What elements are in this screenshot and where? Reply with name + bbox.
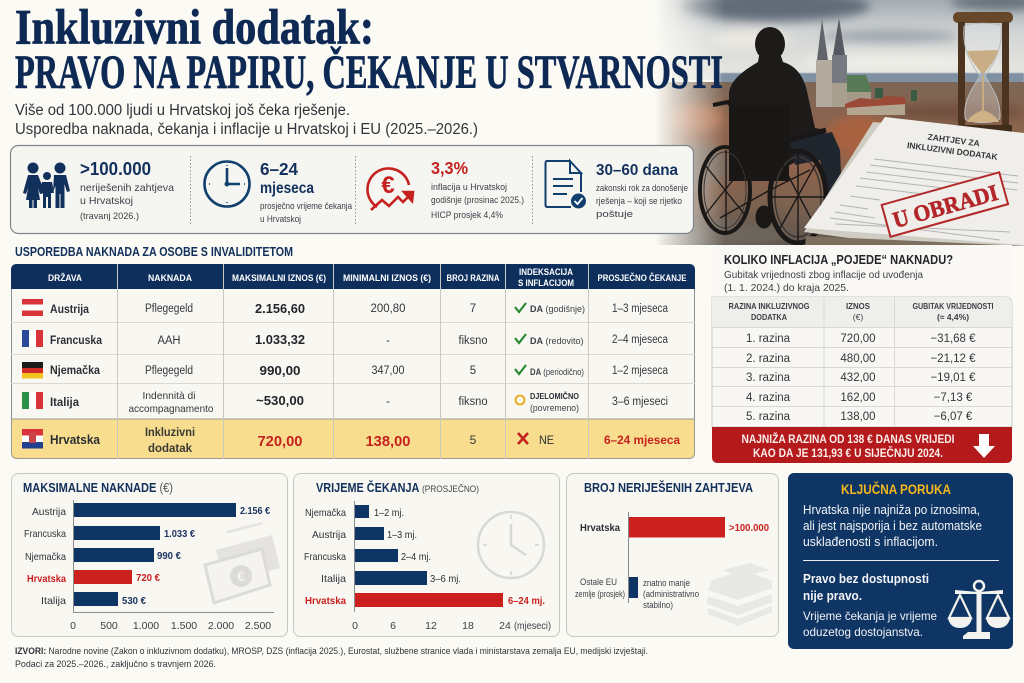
stat: pending requests	[80, 159, 174, 222]
heading: pending requests: BROJ NERIJEŠENIH ZAHTJEVA	[584, 480, 753, 495]
hourglass	[953, 12, 1013, 133]
inflation table: 5. razina	[746, 411, 791, 423]
bars: pending requests: Ostale EU	[580, 577, 617, 588]
subtitle: Više od 100.000 ljudi u Hrvatskoj još čeka rješenje.	[15, 102, 350, 119]
inflation table: −6,07 €	[934, 411, 973, 423]
bars: waiting time: 1–3 mj.	[387, 529, 417, 541]
document pile with stamp: ZAHTJEV ZA	[927, 132, 980, 148]
row: Hrvatska highlighted: 5	[470, 433, 477, 447]
inflation table: (≈ 4,4%)	[937, 312, 969, 322]
row: Njemačka	[22, 362, 669, 378]
panel: maximum benefits chart	[12, 474, 288, 636]
panel: waiting time chart	[294, 474, 560, 636]
key message text: Hrvatska nije najniža po iznosima,	[803, 503, 980, 517]
row: Njemačka: DA (periodično)	[530, 367, 584, 377]
row: Hrvatska highlighted: NE	[539, 433, 554, 447]
bars: maximum benefits: Njemačka	[25, 551, 66, 563]
stat: legal deadline	[596, 162, 688, 220]
cathedral	[816, 18, 917, 115]
icon: family	[23, 162, 70, 208]
bars: waiting time: 1–2 mj.	[374, 507, 404, 519]
icon: euro with rising arrow: €	[381, 172, 395, 199]
row: Italija: (povremeno)	[530, 403, 579, 413]
callout: lowest level: KAO DA JE 131,93 € U SIJEČNJU 2024.	[753, 447, 943, 460]
key message text: usklađenosti s inflacijom.	[803, 535, 938, 549]
row: Italija: ~530,00	[256, 393, 304, 408]
stat: pending requests: u Hrvatskoj	[80, 195, 133, 207]
row: Austrija: Pflegegeld	[145, 303, 193, 315]
bars: pending requests: (administrativno	[643, 589, 699, 599]
row: Francuska: fiksno	[458, 335, 488, 347]
row: Njemačka: Pflegegeld	[145, 365, 193, 377]
bars: waiting time: 18	[462, 620, 474, 632]
key message conclusion: oduzetog dostojanstva.	[803, 625, 923, 639]
stat: waiting time: 6–24	[260, 159, 298, 179]
bars: waiting time: 6–24 mj.	[508, 595, 545, 607]
stat: inflation: inflacija u Hrvatskoj	[431, 182, 507, 193]
stat: pending requests: (travanj 2026.)	[80, 211, 139, 222]
bars: maximum benefits: 2.000	[208, 620, 234, 632]
stat: inflation: 3,3%	[431, 158, 468, 178]
bars: maximum benefits: 990 €	[157, 550, 181, 562]
bars: pending requests: zemlje (prosjek)	[575, 589, 625, 600]
stat: legal deadline: 30–60 dana	[596, 162, 678, 179]
inflation table: DODATKA	[751, 312, 787, 322]
title: PRAVO NA PAPIRU, ČEKANJE U STVARNOSTI	[15, 45, 723, 99]
bars: maximum benefits: 2.500	[245, 620, 271, 632]
row: Hrvatska highlighted: 720,00	[258, 433, 302, 450]
row: Hrvatska highlighted: 6–24 mjeseca	[604, 433, 680, 447]
row: Austrija: Austrija	[50, 304, 90, 316]
row: Italija: Italija	[50, 397, 80, 409]
subtitle: Usporedba naknada, čekanja i inflacije u Hrvatskoj i EU (2025.–2026.)	[15, 121, 478, 138]
stat: legal deadline: zakonski rok za donošenje	[596, 183, 688, 194]
icon: banknotes watermark	[205, 522, 280, 603]
bars: maximum benefits: 1.033 €	[164, 528, 195, 540]
bars: maximum benefits: Hrvatska	[27, 573, 66, 585]
heading: key message: KLJUČNA PORUKA	[841, 482, 951, 497]
row: Hrvatska highlighted: Hrvatska	[50, 433, 101, 447]
stat: waiting time: prosječno vrijeme čekanja	[260, 201, 353, 212]
panel: inflation loss	[712, 245, 1012, 463]
document pile with stamp	[804, 117, 1024, 246]
panel: pending requests chart	[566, 474, 778, 636]
row: Francuska: 1.033,32	[255, 332, 305, 347]
bars: maximum benefits: Italija	[41, 595, 66, 607]
man silhouette	[729, 27, 842, 200]
icon: clock watermark	[478, 512, 544, 578]
icon: euro with rising arrow	[367, 168, 413, 210]
icon: document with check	[546, 161, 586, 208]
bars: waiting time: 12	[425, 620, 437, 632]
row: Austrija	[22, 299, 669, 316]
inflation table: 432,00	[840, 372, 876, 384]
row: Njemačka: 347,00	[372, 365, 404, 377]
icon: banknotes watermark: €	[237, 568, 245, 584]
row: Italija: accompagnamento	[128, 403, 214, 415]
row: Francuska: 2–4 mjeseca	[612, 334, 669, 346]
row: Italija: DJELOMIČNO	[530, 390, 579, 401]
inflation table: 162,00	[840, 392, 876, 404]
stat: pending requests: neriješenih zahtjeva	[80, 182, 174, 194]
icon: scales of justice	[948, 581, 1010, 639]
row: Hrvatska highlighted: dodatak	[148, 441, 192, 455]
row: Hrvatska highlighted	[22, 425, 680, 455]
document pile with stamp: INKLUZIVNI DODATAK	[906, 140, 999, 162]
bars: maximum benefits: Francuska	[24, 528, 66, 540]
bars: waiting time: 2–4 mj.	[401, 551, 431, 563]
inflation table: GUBITAK VRIJEDNOSTI	[912, 301, 994, 311]
stat: inflation: HICP prosjek 4,4%	[431, 210, 503, 221]
inflation table: RAZINA INKLUZIVNOG	[728, 301, 810, 311]
inflation table: −31,68 €	[930, 333, 976, 345]
bars: maximum benefits	[24, 500, 274, 632]
bars: waiting time: Francuska	[304, 551, 346, 563]
row: Italija: -	[386, 396, 390, 408]
table header: INDEKSACIJA	[519, 267, 573, 278]
bars: pending requests: >100.000	[729, 522, 769, 534]
inflation table: −21,12 €	[930, 353, 976, 365]
bars: maximum benefits: 720 €	[136, 572, 160, 584]
row: Italija: fiksno	[458, 396, 488, 408]
inflation description: Gubitak vrijednosti zbog inflacije od uvođenja	[724, 269, 923, 281]
row: Njemačka: 990,00	[260, 363, 300, 378]
inflation table: 2. razina	[746, 353, 791, 365]
row: Hrvatska highlighted: 138,00	[366, 433, 410, 450]
bars: pending requests: stabilno)	[643, 600, 673, 610]
bars: waiting time: Austrija	[312, 529, 346, 541]
icon: paper stack watermark	[707, 563, 772, 626]
stat: waiting time	[260, 159, 353, 225]
bars: waiting time: 0	[352, 620, 358, 632]
stat: inflation	[431, 158, 524, 221]
bars: waiting time: 24	[499, 620, 511, 632]
bars: waiting time: 3–6 mj.	[430, 573, 461, 585]
inflation description	[724, 269, 923, 294]
inflation table: IZNOS	[846, 301, 870, 311]
key message conclusion: nije pravo.	[803, 588, 862, 603]
title	[15, 0, 723, 99]
panel: key message	[788, 473, 1013, 649]
bars: maximum benefits: 1.500	[171, 620, 197, 632]
inflation table: 480,00	[840, 353, 876, 365]
row: Francuska	[22, 330, 669, 347]
row: Njemačka: Njemačka	[50, 365, 101, 377]
title: Inkluzivni dodatak:	[15, 0, 374, 54]
wheelchair	[700, 102, 826, 243]
stat: waiting time: u Hrvatskoj	[260, 214, 301, 225]
table header: BROJ RAZINA	[446, 273, 500, 284]
row: Austrija: 1–3 mjeseca	[612, 303, 669, 315]
comparison table	[11, 264, 695, 459]
stat: inflation: godišnje (prosinac 2025.)	[431, 195, 524, 206]
stamp: U OBRADI: U OBRADI	[890, 180, 1001, 233]
bars: waiting time	[304, 501, 551, 632]
panel: key figures	[10, 146, 694, 234]
stat: legal deadline: poštuje	[596, 209, 633, 220]
inflation table	[712, 297, 1012, 427]
row: Francuska: DA (redovito)	[530, 336, 584, 346]
inflation description: (1. 1. 2024.) do kraja 2025.	[724, 282, 849, 294]
row: Austrija: DA (godišnje)	[530, 304, 585, 314]
bars: waiting time: (mjeseci)	[514, 620, 551, 632]
row: Italija	[22, 390, 668, 415]
table header	[48, 267, 686, 289]
table header: DRŽAVA	[48, 272, 82, 284]
bars: pending requests	[575, 512, 769, 610]
bars: maximum benefits: 0	[70, 620, 76, 632]
bars: maximum benefits: 1.000	[133, 620, 159, 632]
bars: waiting time: 6	[390, 620, 396, 632]
inflation table: −7,13 €	[934, 392, 973, 404]
bars: maximum benefits: 2.156 €	[240, 505, 270, 517]
row: Italija: Indennità di	[142, 390, 196, 402]
inflation table: 4. razina	[746, 392, 791, 404]
row: Njemačka: 1–2 mjeseca	[612, 365, 669, 377]
row: Austrija: 7	[470, 303, 476, 315]
heading: waiting time: VRIJEME ČEKANJA (PROSJEČNO)	[316, 480, 479, 495]
inflation table: 1. razina	[746, 333, 791, 345]
row: Italija: 3–6 mjeseci	[612, 396, 668, 408]
icon: clock	[204, 162, 250, 206]
row: Austrija: 200,80	[370, 303, 406, 315]
bars: waiting time: Hrvatska	[305, 595, 346, 607]
heading: maximum benefits: MAKSIMALNE NAKNADE (€)	[23, 481, 173, 495]
inflation table: 720,00	[840, 333, 876, 345]
row: Njemačka: 5	[470, 365, 476, 377]
row: Austrija: 2.156,60	[255, 301, 305, 316]
table header: MAKSIMALNI IZNOS (€)	[232, 273, 326, 284]
sources note: IZVORI: Narodne novine (Zakon o inkluzivnom dodatku), MROSP, DZS (inflacija 2025.), Eurostat, službene stranice vlada i ministarstava zemalja EU, medijski izvještaji.	[15, 646, 648, 657]
bars: waiting time: Italija	[321, 573, 346, 585]
bars: pending requests: znatno manje	[643, 578, 690, 588]
row: Francuska: AAH	[158, 335, 180, 347]
key message text: ali jest najsporija i bez automatske	[803, 519, 982, 533]
subtitle	[15, 102, 478, 138]
inflation table: 3. razina	[746, 372, 791, 384]
heading: inflation: KOLIKO INFLACIJA „POJEDE“ NAKNADU?	[724, 252, 953, 267]
bars: maximum benefits: Austrija	[32, 506, 66, 518]
table header: PROSJEČNO ČEKANJE	[598, 272, 686, 284]
table header: S INFLACIJOM	[518, 278, 574, 289]
callout: lowest level: NAJNIŽA RAZINA OD 138 € DANAS VRIJEDI	[742, 433, 954, 446]
inflation table: (€)	[853, 312, 863, 322]
bars: pending requests: Hrvatska	[580, 522, 620, 534]
bars: waiting time: Njemačka	[305, 507, 346, 519]
inflation table: 138,00	[840, 411, 876, 423]
row: Francuska: Francuska	[50, 335, 103, 347]
bars: maximum benefits: 500	[100, 620, 118, 632]
stat: legal deadline: rješenja – koji se rijetko	[596, 196, 682, 207]
inflation table: −19,01 €	[930, 372, 976, 384]
sources note: Podaci za 2025.–2026., zaključno s travnjem 2026.	[15, 659, 216, 670]
table header: MINIMALNI IZNOS (€)	[343, 273, 431, 284]
key message conclusion: Vrijeme čekanja je vrijeme	[803, 609, 937, 623]
key message conclusion	[803, 571, 937, 639]
stat: waiting time: mjeseca	[260, 180, 314, 197]
table header: NAKNADA	[148, 273, 192, 284]
heading: comparison table: USPOREDBA NAKNADA ZA OSOBE S INVALIDITETOM	[15, 244, 293, 259]
stat: pending requests: >100.000	[80, 159, 151, 179]
sources note	[15, 646, 648, 670]
bars: maximum benefits: 530 €	[122, 595, 146, 607]
row: Hrvatska highlighted: Inkluzivni	[145, 425, 195, 439]
key message conclusion: Pravo bez dostupnosti	[803, 571, 929, 586]
header photo: man in wheelchair overlooking Zagreb	[640, 0, 1024, 247]
key message text	[803, 503, 982, 549]
row: Francuska: -	[386, 335, 390, 347]
callout: lowest level	[712, 427, 1012, 463]
